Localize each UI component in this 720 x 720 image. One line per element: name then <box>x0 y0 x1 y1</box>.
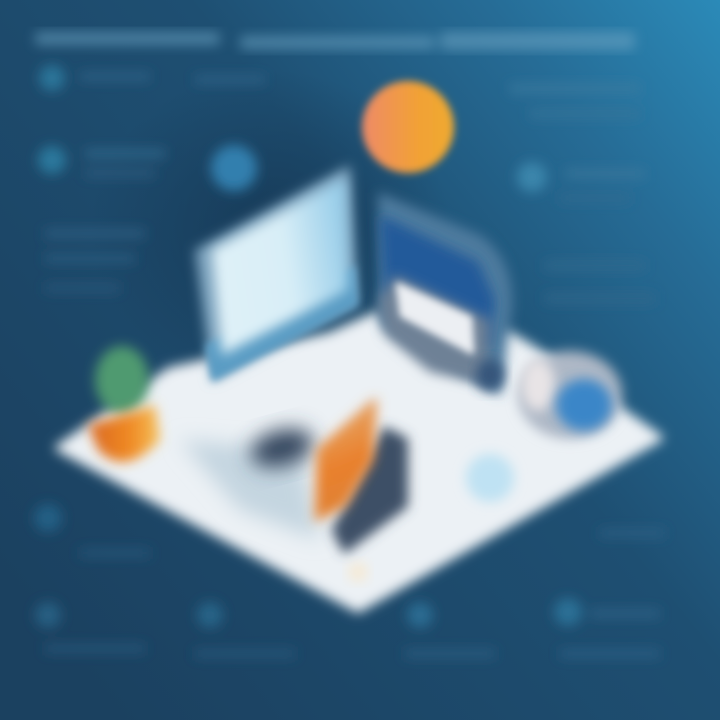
plant <box>88 346 160 462</box>
left column items <box>38 65 265 291</box>
small accent <box>348 562 368 582</box>
bottom row items <box>34 504 665 657</box>
icon: orange circle <box>362 81 454 173</box>
dark haze behind monitors <box>90 70 450 390</box>
keyboard shadow <box>246 422 318 474</box>
platform <box>58 315 660 610</box>
phone <box>316 400 375 520</box>
icon: blue badge <box>211 145 257 191</box>
right monitor <box>378 192 512 395</box>
left monitor <box>195 165 358 382</box>
phone base <box>335 430 405 550</box>
shaded area on platform <box>180 440 320 540</box>
device: blue ellipse <box>518 351 622 439</box>
icon: cloud <box>466 454 514 502</box>
right column items <box>510 85 655 302</box>
title bar <box>35 32 635 50</box>
